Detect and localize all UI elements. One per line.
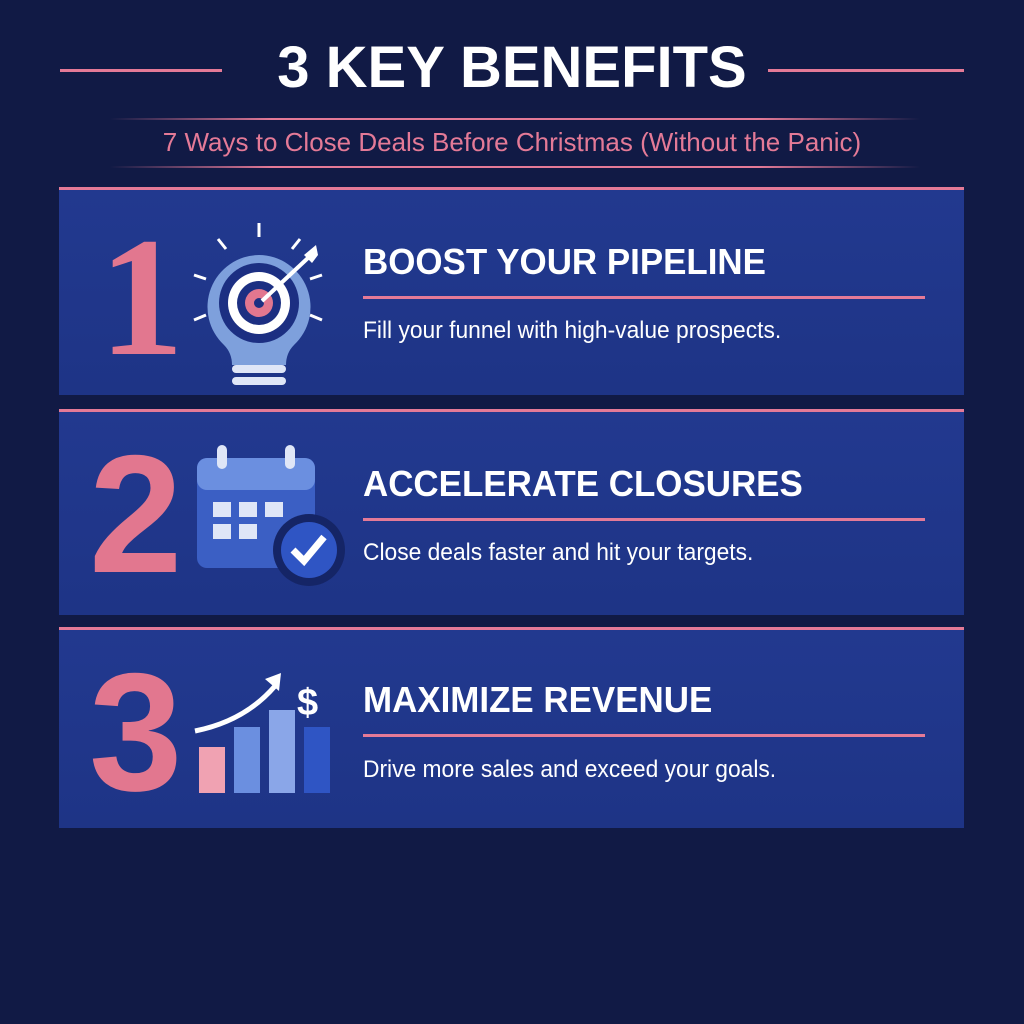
heading: BOOST YOUR PIPELINE	[363, 241, 766, 282]
number 1: 1	[99, 203, 184, 391]
panel: boost pipeline	[59, 187, 964, 395]
panel: accelerate closures	[59, 409, 964, 615]
icon: lightbulb target	[194, 223, 322, 385]
panel: maximize revenue	[59, 627, 964, 828]
icon: bar chart	[194, 673, 330, 793]
icon: bar chart: $	[297, 682, 318, 724]
number 3: 3	[89, 638, 182, 826]
heading: ACCELERATE CLOSURES	[363, 463, 803, 504]
icon: calendar check	[197, 445, 345, 586]
description: Close deals faster and hit your targets.	[363, 539, 753, 566]
heading: MAXIMIZE REVENUE	[363, 679, 712, 720]
number 2: 2	[89, 420, 182, 608]
description: Drive more sales and exceed your goals.	[363, 756, 776, 783]
description: Fill your funnel with high-value prospects.	[363, 317, 781, 344]
subtitle: 7 Ways to Close Deals Before Christmas (Without the Panic)	[163, 127, 861, 157]
title: 3 KEY BENEFITS	[277, 35, 747, 100]
